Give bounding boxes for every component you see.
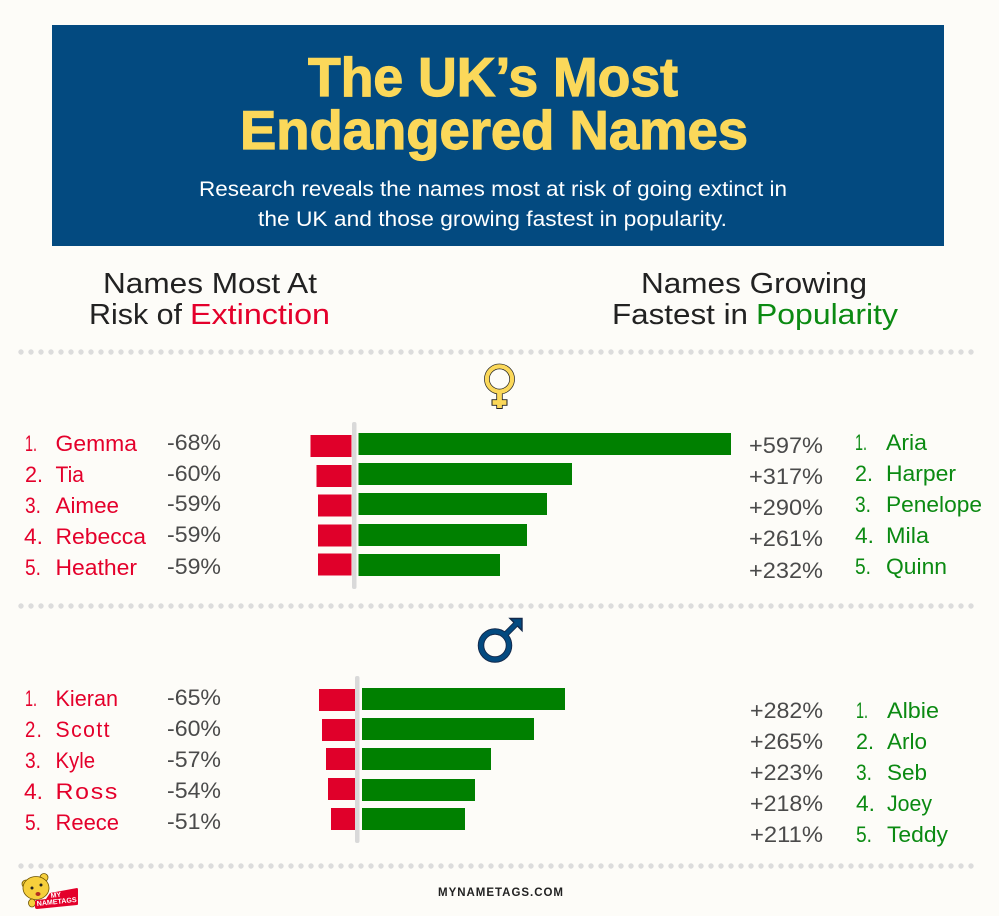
male growth 3 Seb: +223% bbox=[750, 760, 823, 785]
male growth 1 Albie: +282% bbox=[750, 698, 823, 723]
male risk 4 Ross: -54% bbox=[167, 778, 221, 803]
female risk 1 Gemma bbox=[25, 430, 221, 456]
male growth 2 Arlo bbox=[750, 729, 927, 754]
male growth 5 Teddy: 5. bbox=[856, 822, 872, 847]
female risk 4 Rebecca: 4. bbox=[24, 524, 43, 549]
heading: names growing fastest in popularity: Popularity bbox=[756, 299, 899, 331]
male growth 1 Albie: Albie bbox=[887, 698, 939, 723]
male growth 1 Albie bbox=[750, 698, 939, 723]
female risk 3 Aimee: -59% bbox=[167, 491, 221, 516]
logo: bear with name tag: NAMETAGS bbox=[36, 897, 77, 908]
male red bars bbox=[319, 689, 355, 830]
female risk 4 Rebecca: -59% bbox=[167, 522, 221, 547]
heading: names most at risk of extinction bbox=[89, 268, 330, 331]
female red bars bbox=[310, 435, 352, 576]
male green bars bbox=[362, 688, 565, 830]
male risk 2 Scott: 2. bbox=[25, 717, 43, 742]
female risk 4 Rebecca bbox=[24, 522, 221, 549]
female growth 5 Quinn bbox=[749, 554, 947, 583]
subtitle: Research reveals the names most at risk of going extinct in bbox=[199, 177, 787, 201]
logo: bear with name tag: MY bbox=[50, 892, 62, 900]
female growth 5 Quinn: Quinn bbox=[886, 554, 947, 579]
female growth 2 Harper bbox=[749, 461, 956, 489]
female growth 5 Quinn: 5. bbox=[855, 554, 871, 579]
female growth 1 Aria: 1. bbox=[855, 430, 867, 455]
female risk 1 Gemma: 1. bbox=[25, 431, 37, 456]
female risk 5 Heather: Heather bbox=[56, 555, 137, 580]
male risk 2 Scott: -60% bbox=[167, 716, 221, 741]
logo: bear with name tag bbox=[22, 874, 78, 909]
male risk 1 Kieran: Kieran bbox=[56, 686, 118, 711]
male risk 4 Ross: 4. bbox=[24, 779, 43, 804]
male risk 5 Reece: 5. bbox=[25, 810, 41, 835]
female risk 3 Aimee: Aimee bbox=[56, 493, 119, 518]
female risk 1 Gemma: -68% bbox=[167, 430, 221, 455]
male risk 2 Scott: Scott bbox=[56, 717, 111, 742]
male growth 4 Joey: Joey bbox=[887, 791, 932, 816]
male risk 3 Kyle: Kyle bbox=[56, 748, 95, 773]
male risk 1 Kieran: -65% bbox=[167, 685, 221, 710]
female risk list bbox=[24, 430, 221, 580]
female growth 4 Mila: Mila bbox=[886, 523, 930, 548]
subtitle bbox=[199, 177, 787, 231]
icon: male symbol bbox=[481, 618, 522, 660]
female growth 4 Mila bbox=[749, 523, 930, 551]
male risk 5 Reece: -51% bbox=[167, 809, 221, 834]
male growth 4 Joey bbox=[750, 791, 932, 816]
male growth 5 Teddy: +211% bbox=[750, 822, 823, 847]
male risk 5 Reece: Reece bbox=[56, 810, 119, 835]
female growth 2 Harper: +317% bbox=[749, 464, 823, 489]
heading: names growing fastest in popularity: Names Growing bbox=[641, 268, 867, 300]
male growth 2 Arlo: Arlo bbox=[887, 729, 927, 754]
female growth 5 Quinn: +232% bbox=[749, 558, 823, 583]
female growth 1 Aria: Aria bbox=[886, 430, 928, 455]
female green bars bbox=[358, 433, 731, 576]
male growth 1 Albie: 1. bbox=[856, 698, 868, 723]
female growth 3 Penelope: +290% bbox=[749, 495, 823, 520]
female risk 2 Tia: Tia bbox=[56, 462, 85, 487]
male risk 3 Kyle bbox=[25, 747, 221, 773]
male risk list bbox=[24, 685, 221, 835]
female growth 2 Harper: 2. bbox=[855, 461, 873, 486]
title bbox=[240, 46, 748, 161]
heading: names most at risk of extinction: Risk of bbox=[89, 299, 183, 331]
female risk 2 Tia bbox=[25, 461, 221, 487]
male growth 5 Teddy bbox=[750, 822, 948, 847]
female risk 1 Gemma: Gemma bbox=[56, 431, 138, 456]
male risk 4 Ross: Ross bbox=[56, 779, 119, 804]
header banner bbox=[52, 25, 944, 246]
female risk 5 Heather bbox=[25, 554, 221, 580]
male risk 2 Scott bbox=[25, 716, 221, 742]
female growth 3 Penelope: Penelope bbox=[886, 492, 982, 517]
female risk 5 Heather: -59% bbox=[167, 554, 221, 579]
male risk 3 Kyle: -57% bbox=[167, 747, 221, 772]
footer website: MYNAMETAGS.COM bbox=[438, 887, 563, 899]
heading: names growing fastest in popularity bbox=[612, 268, 899, 331]
male growth 4 Joey: 4. bbox=[856, 791, 875, 816]
title: The UK’s Most bbox=[308, 46, 678, 108]
male risk 1 Kieran bbox=[25, 685, 221, 711]
male risk 1 Kieran: 1. bbox=[25, 686, 37, 711]
icon: female symbol bbox=[487, 366, 512, 409]
male growth 4 Joey: +218% bbox=[750, 791, 823, 816]
male risk 3 Kyle: 3. bbox=[25, 748, 41, 773]
female growth 1 Aria bbox=[749, 430, 928, 458]
female growth 4 Mila: +261% bbox=[749, 526, 823, 551]
female growth 4 Mila: 4. bbox=[855, 523, 874, 548]
male growth 3 Seb bbox=[750, 760, 927, 785]
title: Endangered Names bbox=[240, 99, 748, 161]
female growth 2 Harper: Harper bbox=[886, 461, 956, 486]
female bar chart bbox=[310, 422, 731, 589]
male growth 2 Arlo: 2. bbox=[856, 729, 874, 754]
male risk 4 Ross bbox=[24, 778, 221, 804]
female risk 5 Heather: 5. bbox=[25, 555, 41, 580]
heading: names most at risk of extinction: Extinction bbox=[190, 299, 330, 331]
male growth 5 Teddy: Teddy bbox=[887, 822, 948, 847]
female risk 2 Tia: -60% bbox=[167, 461, 221, 486]
female risk 4 Rebecca: Rebecca bbox=[56, 524, 147, 549]
male growth 2 Arlo: +265% bbox=[750, 729, 823, 754]
female risk 3 Aimee bbox=[25, 491, 221, 518]
male growth list bbox=[750, 698, 948, 847]
male growth 3 Seb: Seb bbox=[887, 760, 927, 785]
female risk 3 Aimee: 3. bbox=[25, 493, 41, 518]
female growth 1 Aria: +597% bbox=[749, 433, 823, 458]
female growth 3 Penelope: 3. bbox=[855, 492, 871, 517]
male growth 3 Seb: 3. bbox=[856, 760, 872, 785]
male risk 5 Reece bbox=[25, 809, 221, 835]
female growth list bbox=[749, 430, 982, 583]
heading: names growing fastest in popularity: Fastest in bbox=[612, 299, 748, 331]
female growth 3 Penelope bbox=[749, 492, 982, 520]
male bar chart bbox=[319, 676, 565, 843]
heading: names most at risk of extinction: Names Most At bbox=[103, 268, 317, 300]
female risk 2 Tia: 2. bbox=[25, 462, 43, 487]
subtitle: the UK and those growing fastest in popularity. bbox=[258, 207, 727, 231]
